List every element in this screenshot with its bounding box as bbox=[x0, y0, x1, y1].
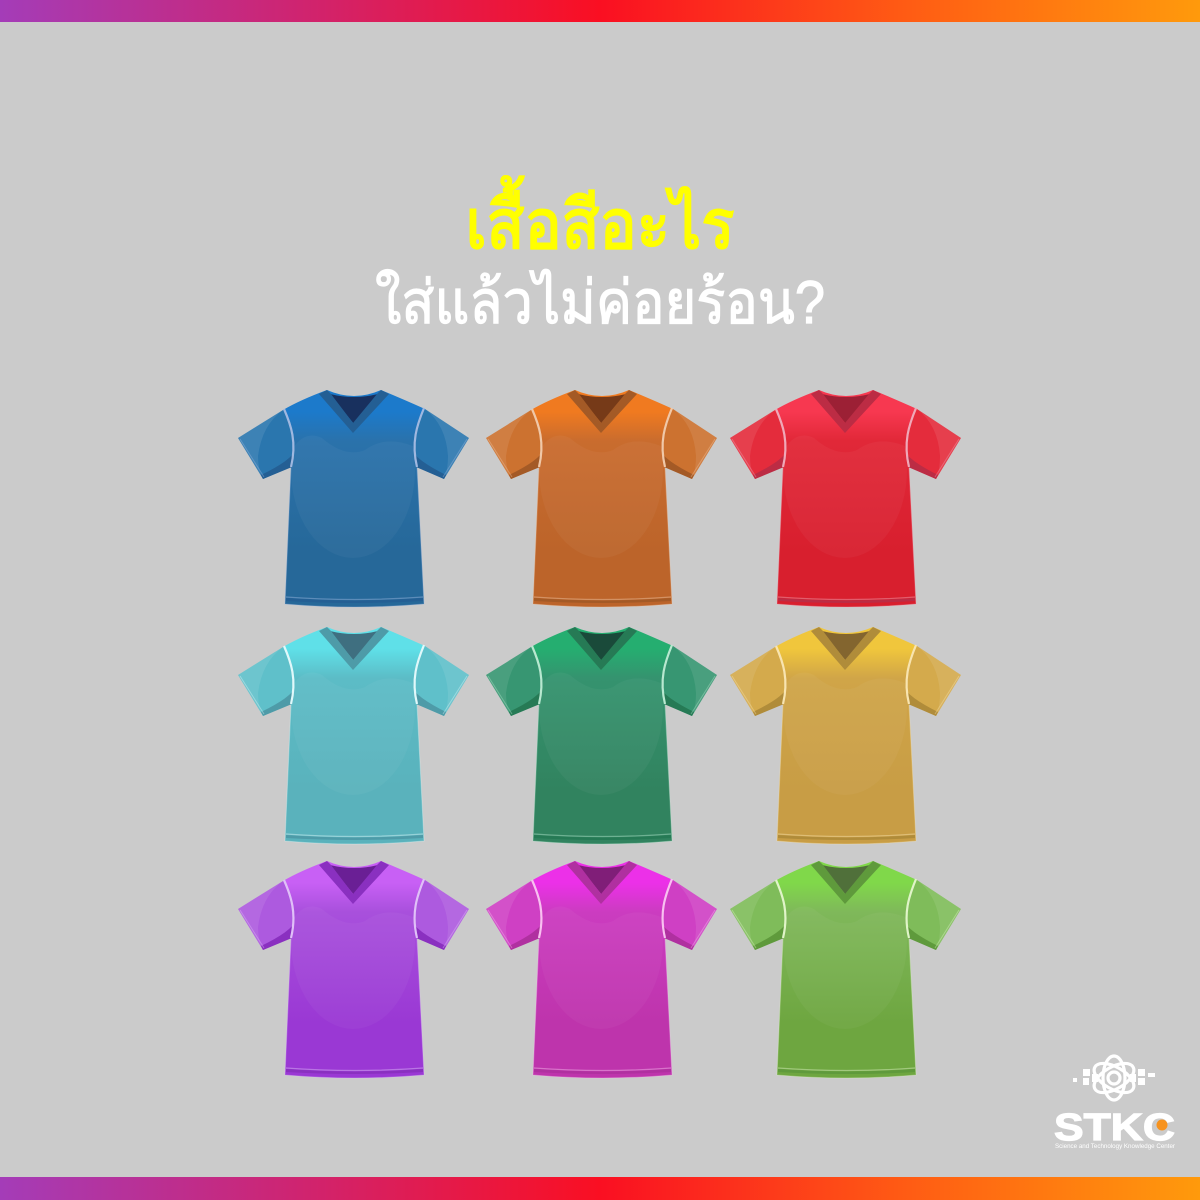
tagline: Science and Technology Knowledge Center bbox=[1055, 1144, 1175, 1150]
shirt: magenta bbox=[486, 861, 717, 1078]
title bbox=[375, 174, 825, 336]
title line 2: ใส่แล้วไม่ค่อยร้อน? bbox=[375, 268, 825, 336]
icon: orange dot bbox=[1156, 1120, 1168, 1130]
icon: pixel squares bbox=[1073, 1069, 1155, 1085]
wordmark: STKC bbox=[1054, 1107, 1175, 1149]
shirt: purple bbox=[238, 861, 469, 1078]
bottom gradient bar bbox=[0, 1177, 1200, 1200]
icon: atom bbox=[1089, 1056, 1139, 1100]
title line 1: เสื้อสีอะไร bbox=[466, 174, 735, 263]
top gradient bar bbox=[0, 0, 1200, 22]
shirt: lime bbox=[730, 861, 961, 1078]
shirt grid bbox=[238, 390, 961, 1078]
shirt: red bbox=[730, 390, 961, 607]
shirt: green bbox=[486, 627, 717, 844]
shirt: cyan bbox=[238, 627, 469, 844]
shirt: blue bbox=[238, 390, 469, 607]
shirt: orange bbox=[486, 390, 717, 607]
shirt: yellow bbox=[730, 627, 961, 844]
logo: STKC bbox=[1054, 1056, 1175, 1150]
